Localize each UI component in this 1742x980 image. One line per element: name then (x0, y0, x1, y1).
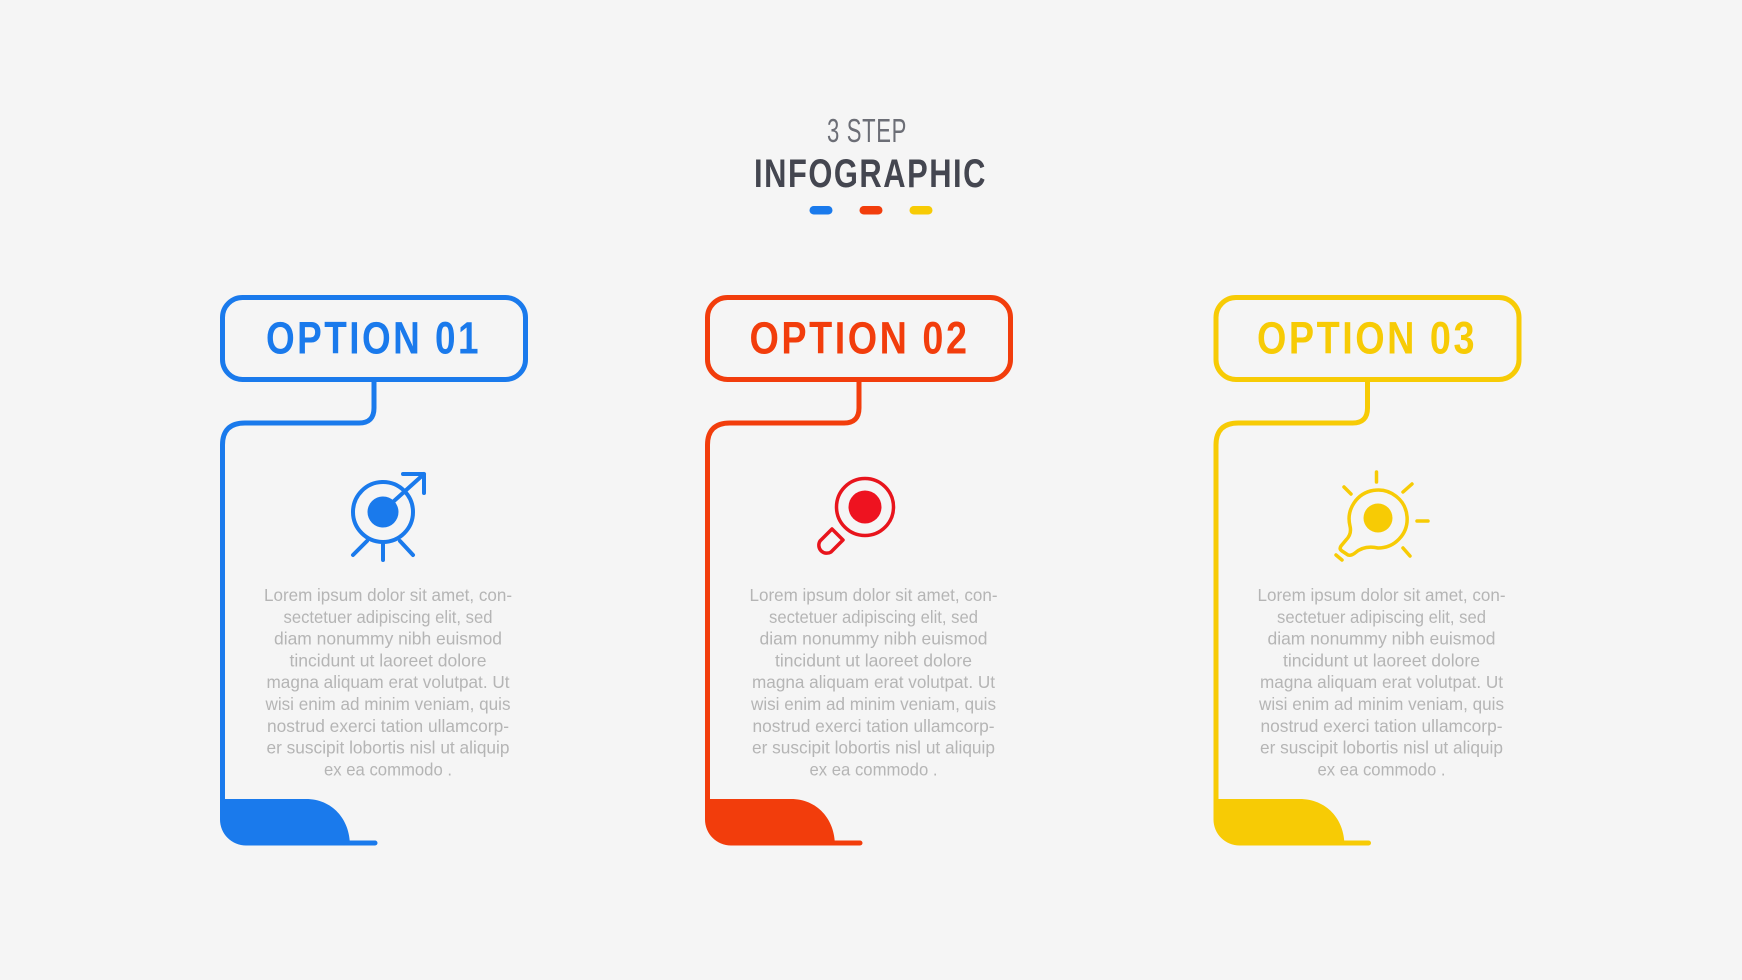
option 02 body text: wisi enim ad minim veniam, quis (750, 694, 996, 714)
option 02 body text: er suscipit lobortis nisl ut aliquip (752, 738, 995, 758)
option 01 frame and connector (220, 298, 526, 846)
option 02 label: OPTION 02 (750, 312, 970, 364)
option 01 body text: Lorem ipsum dolor sit amet, con- (264, 585, 512, 605)
option 03 frame and connector (1214, 298, 1519, 846)
option 01 body text: tincidunt ut laoreet dolore (290, 650, 486, 670)
title line: INFOGRAPHIC: INFOGRAPHIC (754, 152, 987, 196)
icon: magnifier (819, 478, 894, 553)
option 03 body text: tincidunt ut laoreet dolore (1283, 650, 1480, 670)
option 03 body text: ex ea commodo . (1318, 759, 1446, 779)
option 02 body text: sectetuer adipiscing elit, sed (769, 607, 978, 627)
option 02 body text: ex ea commodo . (810, 759, 938, 779)
colour dashes (810, 206, 932, 214)
option 03 body text: nostrud exerci tation ullamcorp- (1260, 716, 1503, 736)
option 03 label: OPTION 03 (1257, 312, 1477, 364)
option 03 body text: magna aliquam erat volutpat. Ut (1260, 672, 1503, 692)
option 02 body text: tincidunt ut laoreet dolore (775, 650, 972, 670)
option 02 body text: nostrud exerci tation ullamcorp- (752, 716, 995, 736)
option 02 body text: Lorem ipsum dolor sit amet, con- (750, 585, 998, 605)
option 01 body text (264, 585, 512, 779)
icon: target with arrow (353, 474, 424, 560)
option 01 body text: magna aliquam erat volutpat. Ut (266, 672, 510, 692)
panel: option 03 (1214, 298, 1519, 846)
option 01 body text: nostrud exerci tation ullamcorp- (267, 716, 509, 736)
option 01 body text: diam nonummy nibh euismod (274, 629, 502, 649)
option 02 body text: magna aliquam erat volutpat. Ut (752, 672, 995, 692)
option 01 body text: wisi enim ad minim veniam, quis (265, 694, 511, 714)
option 01 label: OPTION 01 (266, 312, 481, 364)
option 01 body text: ex ea commodo . (324, 759, 452, 779)
option 01 body text: sectetuer adipiscing elit, sed (284, 607, 492, 627)
option 02 body text (750, 585, 998, 779)
option 03 body text: er suscipit lobortis nisl ut aliquip (1260, 738, 1503, 758)
title (754, 112, 987, 214)
title line: 3 STEP: 3 STEP (827, 112, 907, 149)
option 01 body text: er suscipit lobortis nisl ut aliquip (266, 738, 510, 758)
panel: option 02 (705, 298, 1010, 846)
option 03 body text: sectetuer adipiscing elit, sed (1277, 607, 1486, 627)
panel: option 01 (220, 298, 526, 846)
option 03 body text: wisi enim ad minim veniam, quis (1258, 694, 1504, 714)
option 03 body text: diam nonummy nibh euismod (1268, 629, 1496, 649)
option 03 body text (1258, 585, 1506, 779)
option 02 body text: diam nonummy nibh euismod (760, 629, 988, 649)
icon: light bulb (1336, 472, 1428, 560)
option 03 body text: Lorem ipsum dolor sit amet, con- (1258, 585, 1506, 605)
option 02 frame and connector (705, 298, 1010, 846)
